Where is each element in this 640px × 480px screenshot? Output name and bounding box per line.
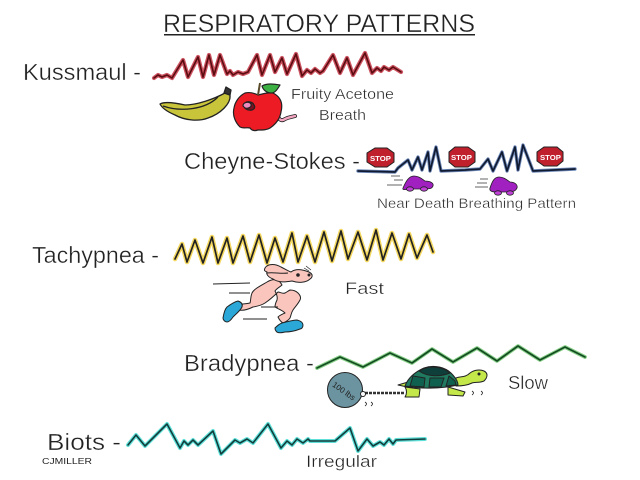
text: Fruity Acetone Breath: [291, 86, 394, 124]
text: Fruity Acetone Breath: Fruity Acetone: [291, 86, 394, 103]
icon: running rabbit: [213, 264, 312, 333]
icon: purple car 1: [387, 176, 433, 191]
icon: stop sign 3: STOP: [540, 153, 561, 162]
waveform: Biots: [128, 424, 425, 454]
label: Tachypnea: Tachypnea -: [32, 242, 159, 268]
text: Near Death Breathing Pattern: Near Death Breathing Pattern: [377, 195, 576, 211]
signature: CJMiller: CJMILLER: [42, 457, 92, 466]
icon: stop sign 2: STOP: [451, 153, 472, 162]
label: Cheyne-Stokes: Cheyne-Stokes -: [184, 148, 360, 174]
waveform: Kussmaul: [154, 53, 401, 78]
icon: stop sign 2: [449, 147, 475, 167]
text: Irregular: Irregular: [306, 452, 377, 471]
text: Fruity Acetone Breath: Breath: [319, 107, 366, 124]
icon: ball and chain: [328, 372, 405, 408]
waveform: Cheyne-Stokes: [358, 145, 575, 172]
icon: turtle: [398, 366, 487, 397]
icon: stop sign 1: [367, 148, 394, 167]
title: RESPIRATORY PATTERNS: [163, 10, 475, 38]
text: Fast: Fast: [345, 279, 384, 298]
label: Bradypnea: Bradypnea -: [184, 350, 314, 376]
text: Slow: Slow: [508, 373, 549, 393]
icon: stop sign 3: [537, 147, 563, 166]
icon: apple with worm: [233, 83, 295, 131]
icon: banana: [160, 87, 231, 120]
waveform: Bradypnea: [317, 346, 585, 368]
icon: stop sign 1: STOP: [370, 154, 391, 163]
icon: ball and chain: 100 lbs: [331, 380, 357, 402]
icon: purple car 2: [475, 177, 517, 195]
waveform: Tachypnea: [175, 230, 433, 263]
label: Kussmaul: Kussmaul -: [23, 59, 141, 85]
label: Biots: Biots -: [47, 429, 121, 455]
